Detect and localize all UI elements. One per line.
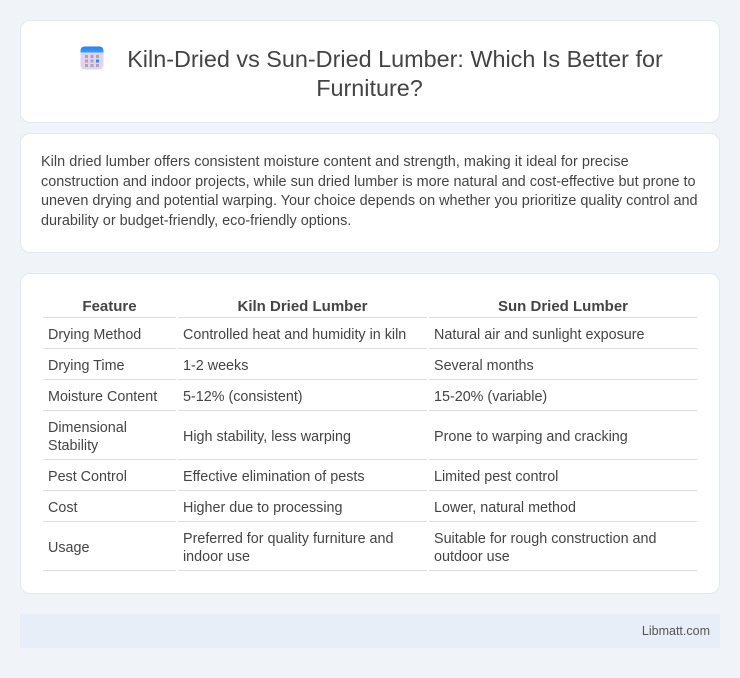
comparison table: 15-20% (variable) bbox=[434, 389, 547, 405]
panel: title card bbox=[20, 20, 720, 123]
text block: introduction: durability or budget-friendly, eco-friendly options. bbox=[41, 212, 351, 228]
text block: introduction: uneven drying and potential warping. Your choice depends on whether you prioritize quality control and bbox=[41, 193, 698, 209]
comparison table: Several months bbox=[434, 358, 534, 374]
comparison table: Pest Control bbox=[48, 469, 127, 485]
comparison table: Cost bbox=[48, 500, 78, 516]
comparison table: Lower, natural method bbox=[434, 500, 576, 516]
comparison table: Limited pest control bbox=[434, 469, 558, 485]
text block: introduction: Kiln dried lumber offers consistent moisture content and strength, making it ideal for precise bbox=[41, 154, 629, 170]
comparison table: indoor use bbox=[183, 549, 250, 565]
footer bar bbox=[20, 614, 720, 648]
icon: calendar bbox=[80, 46, 104, 70]
comparison table bbox=[43, 298, 697, 571]
comparison table: Usage bbox=[48, 540, 89, 556]
comparison table: Moisture Content bbox=[48, 389, 157, 405]
title: Furniture? bbox=[316, 75, 423, 101]
comparison table: Controlled heat and humidity in kiln bbox=[183, 327, 406, 343]
comparison table: Drying Method bbox=[48, 327, 141, 343]
comparison table: Stability bbox=[48, 438, 98, 454]
comparison table: Dimensional bbox=[48, 420, 127, 436]
comparison table: High stability, less warping bbox=[183, 429, 351, 445]
panel: comparison table card bbox=[20, 273, 720, 594]
comparison table: Effective elimination of pests bbox=[183, 469, 365, 485]
comparison table: Kiln Dried Lumber bbox=[237, 298, 368, 315]
text block: introduction bbox=[41, 154, 698, 228]
comparison table: Sun Dried Lumber bbox=[498, 298, 628, 315]
comparison table: Natural air and sunlight exposure bbox=[434, 327, 644, 343]
footer text: source: Libmatt.com bbox=[642, 624, 710, 638]
title bbox=[127, 46, 663, 101]
comparison table: Prone to warping and cracking bbox=[434, 429, 628, 445]
comparison table: Higher due to processing bbox=[183, 500, 342, 516]
comparison table: outdoor use bbox=[434, 549, 510, 565]
comparison table: Drying Time bbox=[48, 358, 125, 374]
text block: introduction: construction and indoor projects, while sun dried lumber is more natural and cost-effective but prone to bbox=[41, 174, 696, 190]
comparison table: 5-12% (consistent) bbox=[183, 389, 303, 405]
title: Kiln-Dried vs Sun-Dried Lumber: Which Is Better for bbox=[127, 46, 663, 72]
comparison table: Suitable for rough construction and bbox=[434, 531, 656, 547]
panel: introduction card bbox=[20, 133, 720, 253]
comparison table: Feature bbox=[82, 298, 137, 315]
comparison table: Preferred for quality furniture and bbox=[183, 531, 394, 547]
comparison table: 1-2 weeks bbox=[183, 358, 248, 374]
